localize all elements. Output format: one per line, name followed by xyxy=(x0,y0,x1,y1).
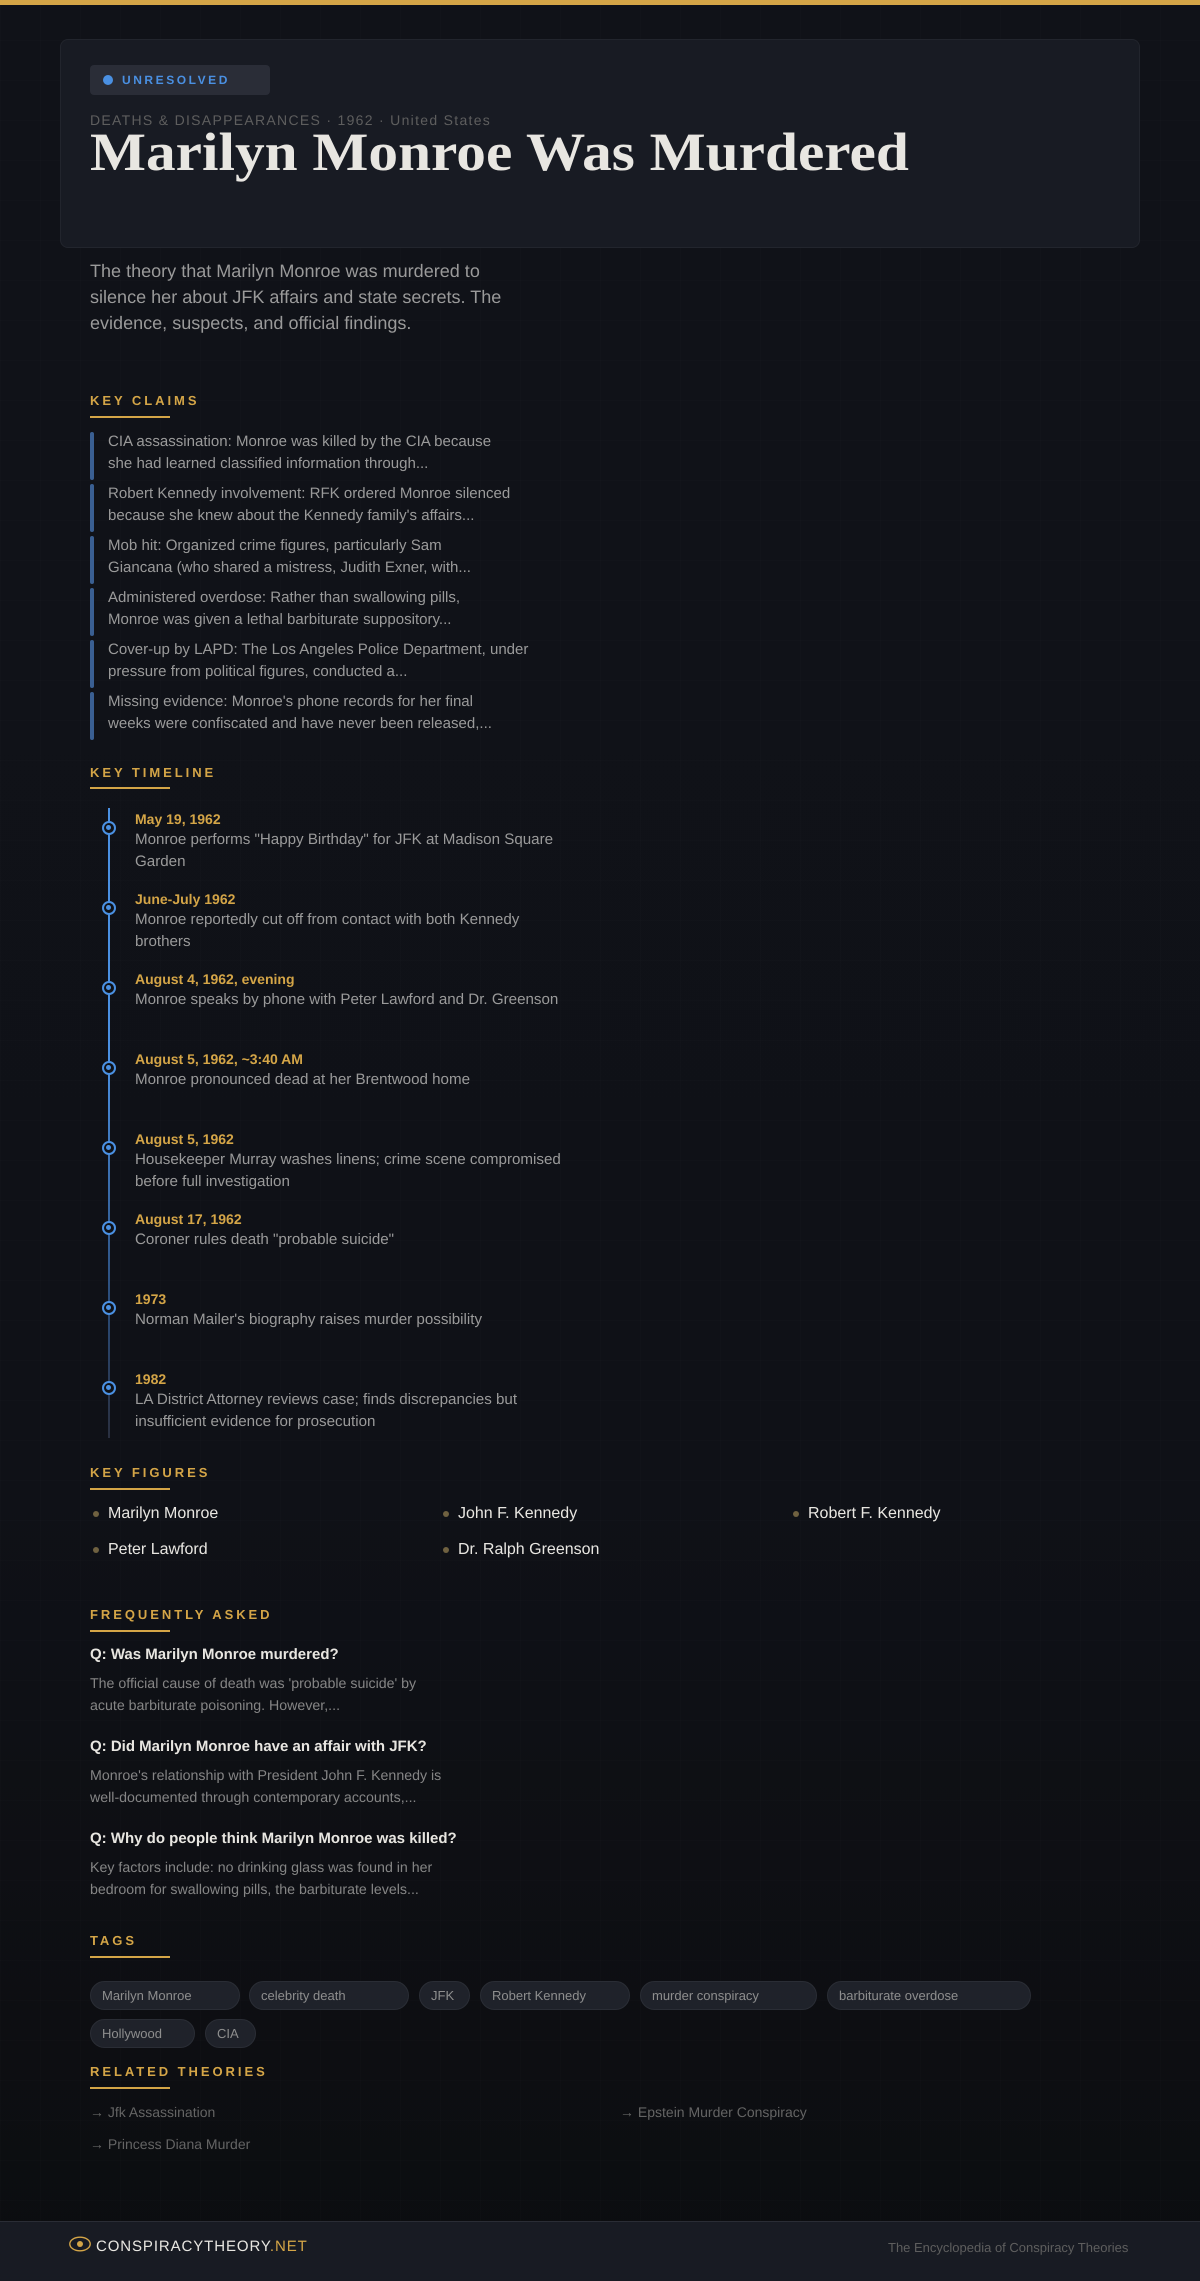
badge label: UNRESOLVED xyxy=(122,73,230,87)
tag: barbiturate overdose: barbiturate overdose xyxy=(839,1988,958,2003)
faq 1: acute barbiturate poisoning. However,... xyxy=(90,1698,340,1714)
heading: key figures: KEY FIGURES xyxy=(90,1465,210,1480)
tag: JFK xyxy=(419,1981,470,2010)
tag: Hollywood xyxy=(90,2019,195,2048)
link: Epstein murder conspiracy: → Epstein Murder Conspiracy xyxy=(620,2104,807,2120)
tag: celebrity death: celebrity death xyxy=(261,1988,346,2003)
figure: Marilyn Monroe: Marilyn Monroe xyxy=(108,1505,218,1522)
faq 3: Key factors include: no drinking glass was found in her xyxy=(90,1860,432,1876)
footer tagline: The Encyclopedia of Conspiracy Theories xyxy=(888,2240,1128,2255)
heading underline xyxy=(90,1630,170,1632)
claim 3: Giancana (who shared a mistress, Judith Exner, with... xyxy=(108,559,471,576)
status badge xyxy=(90,65,270,95)
figure: Dr. Ralph Greenson: Dr. Ralph Greenson xyxy=(458,1541,599,1558)
footer xyxy=(0,2221,1200,2281)
claim 2: because she knew about the Kennedy family's affairs... xyxy=(108,507,474,524)
event: August 17, 1962 xyxy=(102,1211,394,1248)
event: 1982: insufficient evidence for prosecution xyxy=(135,1413,375,1430)
tag: CIA: CIA xyxy=(217,2026,239,2041)
faq 2: Monroe's relationship with President John F. Kennedy is xyxy=(90,1768,441,1784)
claim 3 xyxy=(90,536,471,584)
heading: related theories: RELATED THEORIES xyxy=(90,2064,268,2079)
heading underline xyxy=(90,787,170,789)
panel: key claims xyxy=(90,393,528,740)
tag: Marilyn Monroe: Marilyn Monroe xyxy=(102,1988,192,2003)
tag: murder conspiracy: murder conspiracy xyxy=(652,1988,759,2003)
event: 1982 xyxy=(102,1371,517,1430)
event: August 5, 1962 xyxy=(102,1131,561,1190)
faq 2: Q: Did Marilyn Monroe have an affair with JFK? xyxy=(90,1738,427,1755)
claim 3: Mob hit: Organized crime figures, particularly Sam xyxy=(108,537,442,554)
panel: header card xyxy=(60,39,1140,248)
heading: key claims: KEY CLAIMS xyxy=(90,393,199,408)
claim 6: Missing evidence: Monroe's phone records for her final xyxy=(108,693,473,710)
intro text block: The theory that Marilyn Monroe was murdered to xyxy=(90,261,480,281)
faq 1: The official cause of death was 'probable suicide' by xyxy=(90,1676,416,1692)
icon: status dot xyxy=(103,75,113,85)
heading underline xyxy=(90,416,170,418)
claim 4 xyxy=(90,588,460,636)
panel: frequently asked xyxy=(90,1607,457,1898)
event: May 19, 1962: Monroe performs "Happy Birthday" for JFK at Madison Square xyxy=(135,831,553,848)
event: 1973 xyxy=(102,1291,482,1328)
event: August 17, 1962: Coroner rules death "probable suicide" xyxy=(135,1231,394,1248)
event: August 5, 1962 3:40 AM: August 5, 1962, ~3:40 AM xyxy=(135,1051,303,1067)
figure: Robert F. Kennedy: Robert F. Kennedy xyxy=(808,1505,941,1522)
event: August 4, 1962 xyxy=(102,971,558,1008)
claim 1 xyxy=(90,432,491,480)
tag: Marilyn Monroe xyxy=(90,1981,240,2010)
tag: celebrity death xyxy=(249,1981,409,2010)
event: August 5, 1962 3:40 AM: Monroe pronounced dead at her Brentwood home xyxy=(135,1071,470,1088)
tag: CIA xyxy=(205,2019,256,2048)
event: 1982: 1982 xyxy=(135,1371,166,1387)
event: June-July 1962: June-July 1962 xyxy=(135,891,235,907)
icon: eye logo xyxy=(69,2236,91,2252)
tag: barbiturate overdose xyxy=(827,1981,1031,2010)
event: August 5, 1962: Housekeeper Murray washes linens; crime scene compromised xyxy=(135,1151,561,1168)
figure: John F. Kennedy: John F. Kennedy xyxy=(458,1505,577,1522)
event: August 5, 1962: August 5, 1962 xyxy=(135,1131,234,1147)
claim 5: pressure from political figures, conducted a... xyxy=(108,663,407,680)
tag: JFK: JFK xyxy=(431,1988,454,2003)
claim 5: Cover-up by LAPD: The Los Angeles Police Department, under xyxy=(108,641,528,658)
heading underline xyxy=(90,1956,170,1958)
site wordmark: CONSPIRACYTHEORY.NET xyxy=(96,2238,308,2255)
claim 1: she had learned classified information through... xyxy=(108,455,428,472)
claim 2: Robert Kennedy involvement: RFK ordered Monroe silenced xyxy=(108,485,510,502)
event: 1973: 1973 xyxy=(135,1291,166,1307)
heading underline xyxy=(90,2087,170,2089)
claim 4: Administered overdose: Rather than swallowing pills, xyxy=(108,589,460,606)
top accent bar xyxy=(0,0,1200,5)
intro text block: silence her about JFK affairs and state secrets. The xyxy=(90,287,501,307)
intro text block: evidence, suspects, and official findings. xyxy=(90,313,411,333)
event: August 4, 1962: August 4, 1962, evening xyxy=(135,971,294,987)
event: June-July 1962 xyxy=(102,891,520,950)
tag: murder conspiracy xyxy=(640,1981,817,2010)
faq 1 xyxy=(90,1646,416,1714)
intro text block xyxy=(90,261,501,333)
claim 1: CIA assassination: Monroe was killed by the CIA because xyxy=(108,433,491,450)
category and date meta line: DEATHS & DISAPPEARANCES · 1962 · United States xyxy=(90,112,491,128)
heading underline xyxy=(90,1488,170,1490)
figure: Peter Lawford: Peter Lawford xyxy=(108,1541,208,1558)
faq 3 xyxy=(90,1830,457,1898)
heading: tags: TAGS xyxy=(90,1933,137,1948)
faq 3: bedroom for swallowing pills, the barbiturate levels... xyxy=(90,1882,419,1898)
event: August 4, 1962: Monroe speaks by phone with Peter Lawford and Dr. Greenson xyxy=(135,991,558,1008)
event: May 19, 1962: Garden xyxy=(135,853,186,870)
event: May 19, 1962: May 19, 1962 xyxy=(135,811,221,827)
event: June-July 1962: Monroe reportedly cut off from contact with both Kennedy xyxy=(135,911,519,928)
event: August 17, 1962: August 17, 1962 xyxy=(135,1211,242,1227)
panel: tags xyxy=(90,1933,1031,2048)
event: 1982: LA District Attorney reviews case; finds discrepancies but xyxy=(135,1391,517,1408)
event: June-July 1962: brothers xyxy=(135,933,191,950)
faq 3: Q: Why do people think Marilyn Monroe was killed? xyxy=(90,1830,457,1847)
link: Princess Diana murder: → Princess Diana Murder xyxy=(90,2136,250,2152)
event: 1973: Norman Mailer's biography raises murder possibility xyxy=(135,1311,482,1328)
event: August 5, 1962: before full investigation xyxy=(135,1173,290,1190)
heading: frequently asked: FREQUENTLY ASKED xyxy=(90,1607,273,1622)
tag: Robert Kennedy: Robert Kennedy xyxy=(492,1988,586,2003)
event: May 19, 1962 xyxy=(102,811,553,870)
event: August 5, 1962 3:40 AM xyxy=(102,1051,470,1088)
link: JFK assassination: → Jfk Assassination xyxy=(90,2104,215,2120)
claim 6 xyxy=(90,692,492,740)
panel: related theories xyxy=(90,2064,807,2152)
claim 6: weeks were confiscated and have never been released,... xyxy=(108,715,492,732)
title: Marilyn Monroe Was Murdered xyxy=(90,122,909,182)
claim 5 xyxy=(90,640,528,688)
faq 2 xyxy=(90,1738,441,1806)
claim 2 xyxy=(90,484,510,532)
faq 1: Q: Was Marilyn Monroe murdered? xyxy=(90,1646,339,1663)
tag: Hollywood: Hollywood xyxy=(102,2026,162,2041)
faq 2: well-documented through contemporary accounts,... xyxy=(90,1790,416,1806)
timeline axis xyxy=(108,808,110,1438)
panel: key figures xyxy=(90,1465,941,1558)
claim 4: Monroe was given a lethal barbiturate suppository... xyxy=(108,611,451,628)
panel: key timeline xyxy=(90,765,561,1438)
tag: Robert Kennedy xyxy=(480,1981,630,2010)
heading: key timeline: KEY TIMELINE xyxy=(90,765,216,780)
